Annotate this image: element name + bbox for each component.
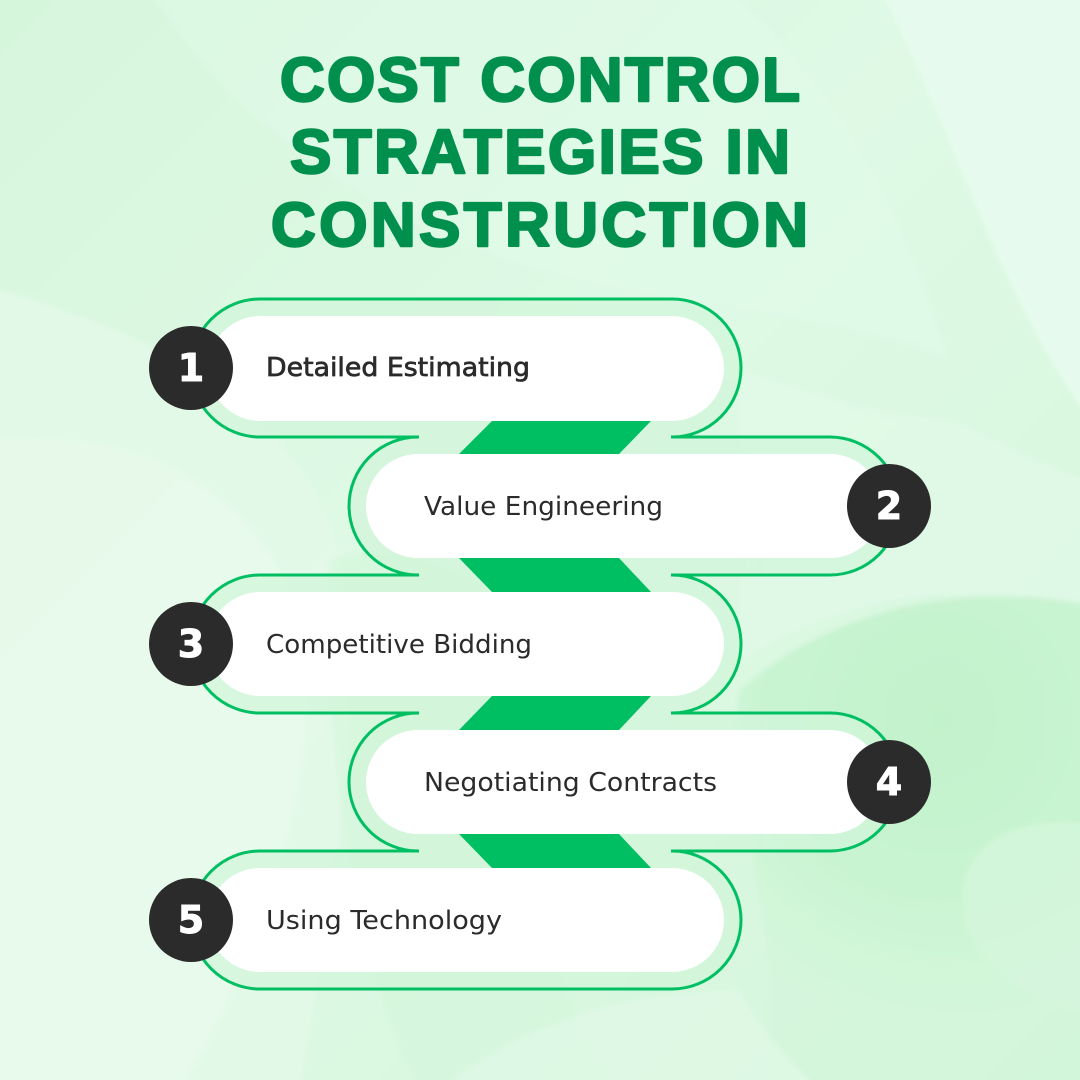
connector: between steps 4 and 5 [459, 834, 651, 868]
step 3: 3 [178, 622, 204, 666]
pale capsule bands behind the pills [191, 299, 899, 989]
title: CONSTRUCTION [271, 191, 808, 260]
green outline path [191, 299, 899, 989]
step 4 [366, 730, 931, 834]
step 5 [149, 868, 724, 972]
step 3: Competitive Bidding [266, 630, 532, 660]
step 1 [149, 316, 724, 421]
step 2 [366, 454, 931, 558]
flow diagram: five linked steps [149, 299, 931, 989]
connector: between steps 2 and 3 [459, 558, 651, 592]
title: STRATEGIES IN [290, 118, 790, 187]
step 1: Detailed Estimating [266, 353, 530, 383]
connector: between steps 1 and 2 [459, 421, 651, 454]
step 1: 1 [178, 346, 204, 390]
step 5: Using Technology [266, 906, 502, 936]
step 4: Negotiating Contracts [424, 768, 717, 798]
step 4: 4 [876, 760, 902, 804]
title [271, 46, 808, 260]
connector: between steps 3 and 4 [459, 696, 651, 730]
step 2: Value Engineering [424, 492, 663, 522]
step 5: 5 [178, 898, 204, 942]
step 3 [149, 592, 724, 696]
title: COST CONTROL [280, 46, 800, 115]
step 2: 2 [876, 484, 902, 528]
